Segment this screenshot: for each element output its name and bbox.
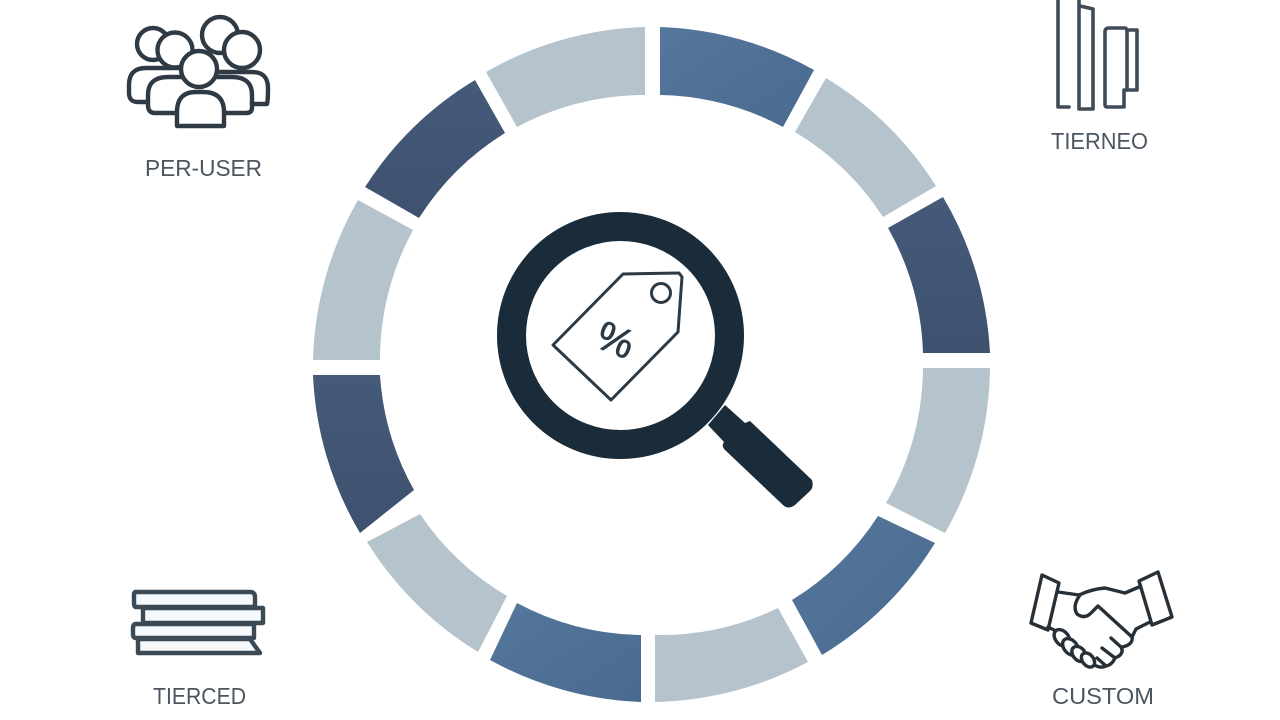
right cuff (1139, 572, 1172, 625)
percent sign: % (590, 312, 641, 368)
icon: handshake (1031, 572, 1172, 670)
icon: group of users (129, 17, 268, 126)
label: top-right tier: TIERNEO (1051, 128, 1148, 154)
icon: magnifying glass over price tag (512, 226, 813, 508)
price tag (553, 273, 682, 400)
donut ring of twelve segments (313, 27, 990, 702)
clasped hands (1058, 587, 1139, 595)
label: custom: CUSTOM (1052, 683, 1154, 709)
magnifier handle (708, 405, 813, 508)
icon: vertical tier bars (1058, 0, 1137, 109)
label: bottom-left tier: TIERCED (153, 683, 246, 709)
left fingers (1051, 627, 1073, 649)
label: per-user: PER-USER (145, 155, 262, 181)
magnifier lens (512, 226, 730, 444)
left cuff (1031, 575, 1059, 630)
icon: stacked layers (133, 592, 263, 653)
